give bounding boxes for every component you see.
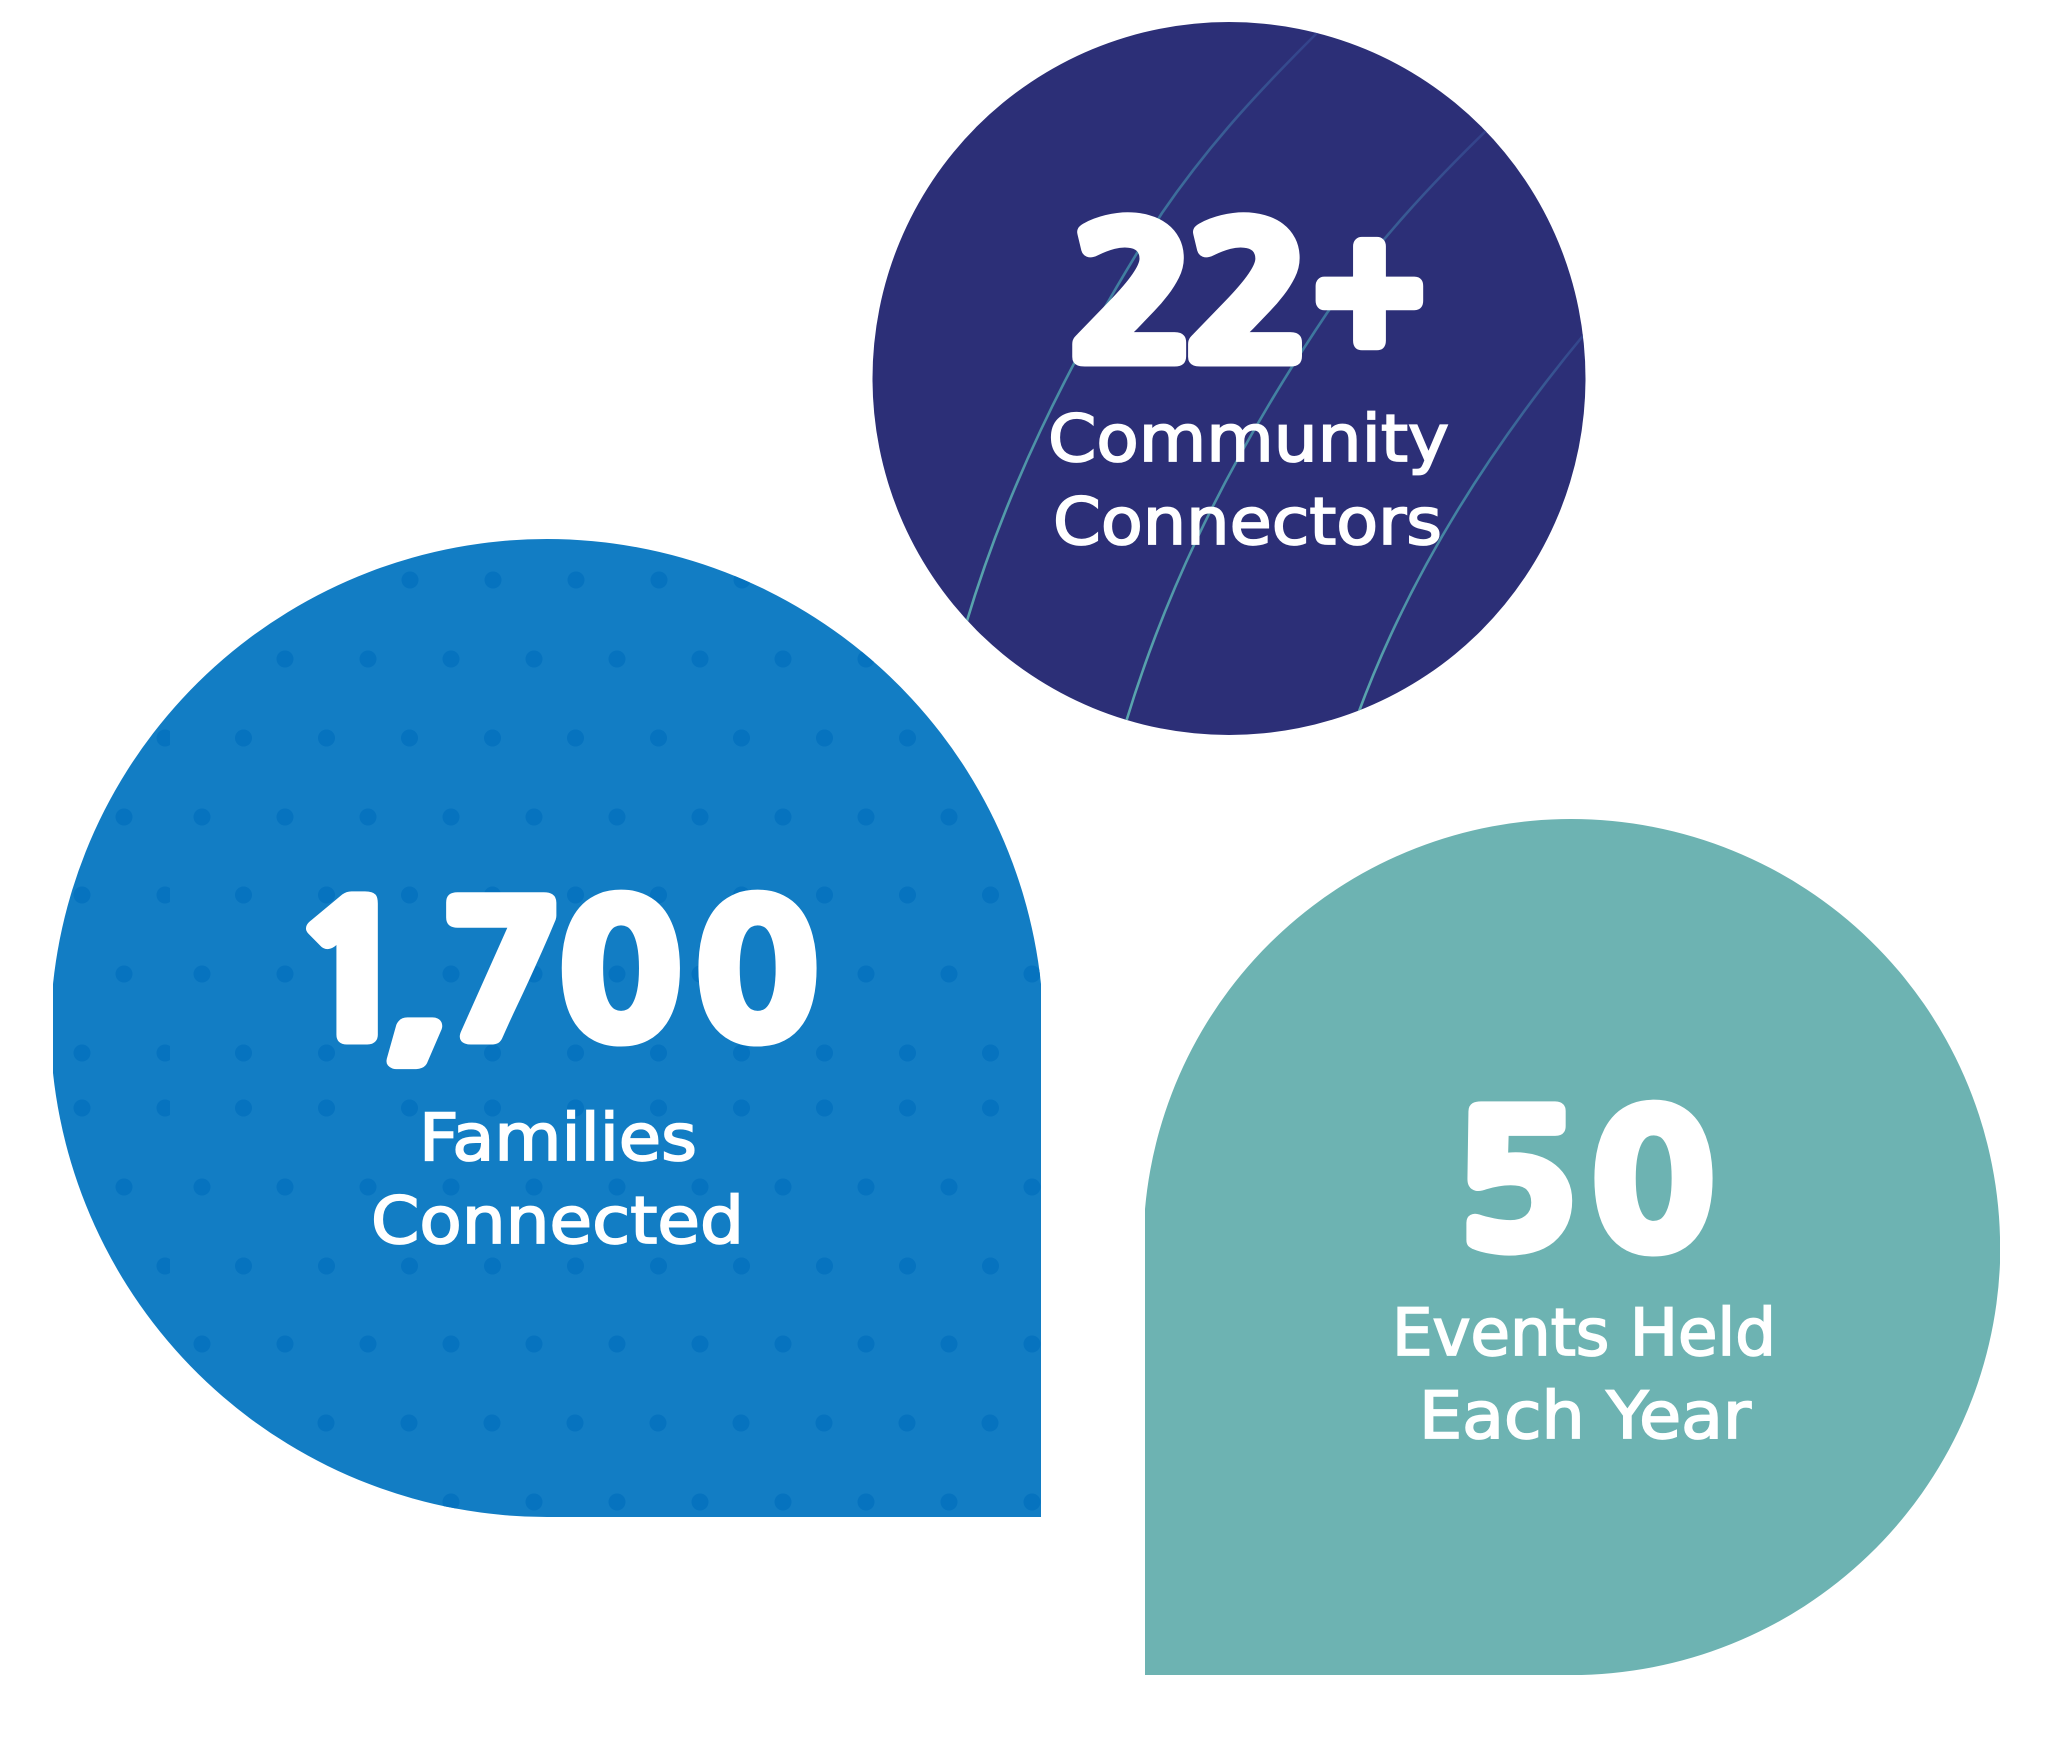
stat number: 50: 50 [1454, 1093, 1713, 1274]
stat number: 22+: + [1313, 208, 1425, 390]
label: Families Connected: Connected [371, 1184, 744, 1259]
label: Families Connected: Families [419, 1101, 697, 1176]
panel: events held shape [1145, 819, 2000, 1675]
panel: community connectors circle [872, 22, 1592, 735]
label: Events Held Each Year: Events Held [1392, 1296, 1776, 1371]
label: Families Connected [371, 1101, 744, 1259]
curved accent lines [966, 32, 1592, 722]
label: Events Held Each Year [1392, 1296, 1776, 1454]
panel: families connected shape [53, 539, 1060, 1517]
stat number: 1,700: 1,700 [291, 883, 817, 1064]
stat number: 22+: 22 [1068, 204, 1313, 387]
label: Community Connectors: Community [1048, 402, 1449, 477]
label: Community Connectors [1048, 402, 1449, 560]
dot pattern [82, 580, 1060, 1502]
label: Community Connectors: Connectors [1053, 485, 1442, 560]
stat number: 22+ [1068, 204, 1425, 390]
label: Events Held Each Year: Each Year [1419, 1379, 1751, 1454]
